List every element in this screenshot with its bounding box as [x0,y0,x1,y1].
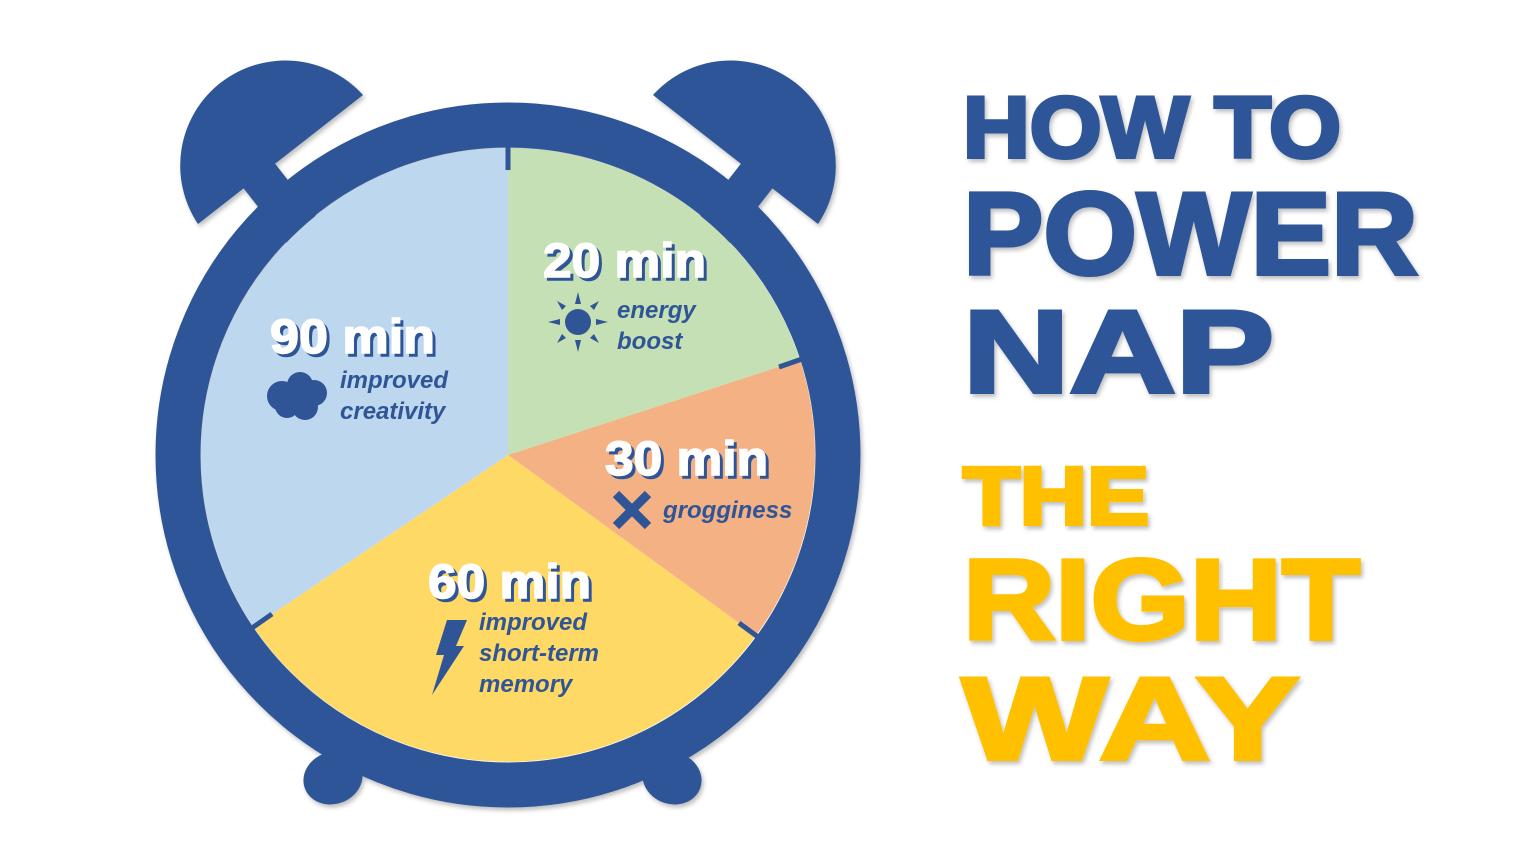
title: how to power nap: HOW TO [963,80,1341,176]
label: 30 min: grogginess [662,497,792,524]
label: 60 min [428,556,599,698]
clock [178,61,838,813]
label: 30 min: 30 min [605,433,768,486]
title: how to power nap [963,80,1418,417]
subtitle: the right way: RIGHT [963,537,1360,664]
label: 90 min: creativity [340,398,447,425]
label: 30 min: 30 min [608,436,771,489]
icon: right bell [653,61,836,261]
label: 20 min: energy [617,297,697,324]
label: 20 min [543,235,709,355]
pie chart [201,148,815,762]
title: how to power nap: POWER [963,168,1418,299]
label: 60 min: memory [479,671,574,698]
icon: lightning [432,620,467,695]
label: 20 min: boost [617,328,683,355]
tick marks [252,146,802,637]
subtitle: the right way [962,451,1360,784]
icon: X [616,494,648,526]
label: 20 min: 20 min [543,235,706,288]
label: 90 min [267,311,449,425]
icon: right foot [635,743,709,813]
icon: sun [548,292,608,352]
label: 60 min: improved [479,609,588,636]
label: 30 min [605,433,792,526]
subtitle: the right way: WAY [962,653,1299,784]
icon: cloud [267,372,327,420]
slice: 90 min [201,148,508,627]
icon: left bell [180,61,363,261]
clock ring [178,125,838,785]
label: 90 min: improved [340,367,449,394]
title: how to power nap: NAP [963,286,1274,417]
slice: 20 min [508,148,800,455]
subtitle: the right way: THE [963,451,1149,542]
label: 20 min: 20 min [546,238,709,291]
label: 60 min: 60 min [431,559,594,612]
slice: 30 min [508,360,815,636]
label: 90 min: 90 min [270,311,435,364]
label: 60 min: short-term [479,640,599,667]
slice: 60 min [254,455,756,762]
label: 90 min: 90 min [273,314,438,367]
label: 60 min: 60 min [428,556,591,609]
icon: left foot [296,743,370,813]
